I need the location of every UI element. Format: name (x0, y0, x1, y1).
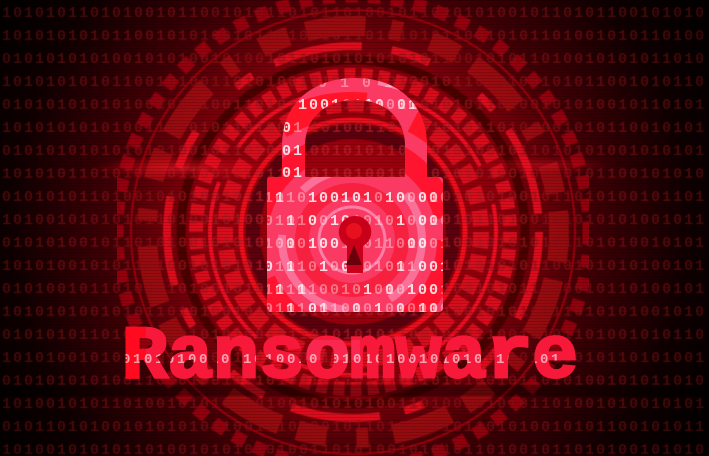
background binary digits: 1010100101011010010101010010101010110100101010101100101010100101 (2, 258, 706, 275)
background binary digits: 1010101101010010110010101101011010010110101010010110101100101010 (2, 166, 706, 183)
title: Ransomware: Ransomware (122, 316, 578, 400)
lock digits, dim layer: 01 01 (282, 165, 469, 182)
title: Ransomware (126, 326, 576, 379)
background binary digits: 0101010101010101001011010101001010110100101001011010101001010101 (2, 143, 706, 160)
lock shackle and body (267, 78, 443, 312)
lock digits, dim layer: 1010100101010100101 (264, 282, 473, 299)
title digit band: 0101010010110100101010101001010100101101 (122, 352, 562, 368)
dark band behind lower digits (0, 385, 709, 396)
background binary digits: 0101010101001101010010110100101101010010101001011010100101011010 (2, 373, 706, 390)
background binary digits: 0101010110100101010101001011010101011001010110010101101001010110 (2, 327, 706, 344)
background binary digits: 1010101101010010110010101101011010010110101010010110101100101010 (2, 5, 706, 22)
lock digits, dim layer: 0101001010101001010 (264, 213, 473, 230)
lock digits, dim layer: 1010100100110100101 (264, 236, 473, 253)
background binary digits: 0101010110100101010010110101010010101101010101001011010100101101 (2, 189, 706, 206)
background binary digits: 1010010101101001010101101001010101001101001010101101001010010101 (2, 396, 706, 413)
lock digits, bright layer: 1 01 0 1 0 10 1 0 (264, 301, 484, 318)
background binary digits: 0101001011010101010010101101001010100110100101011010010110100101 (2, 281, 706, 298)
background binary digits: 0101101010010101010110010101001011010100101101010010101100101011 (2, 419, 706, 436)
lock digits, bright layer: 0 1 1 01 1 0010 1 (264, 259, 484, 276)
lock digits, bright layer: 1 1 1 0 100 1 (264, 282, 473, 299)
title digit band (126, 326, 557, 379)
lock digits, bright layer: 0 100 0 00 1 (264, 236, 484, 253)
background binary digits: 0101010101010010101001101010010101100101010110100101010010110101 (2, 97, 706, 114)
background binary digits: 1010101010100110101011010010101001101001010110101001010110010101 (2, 120, 706, 137)
lock digits, dim layer (267, 78, 443, 312)
lock digits, bright layer: 01 01 (282, 165, 469, 182)
background binary digits: 1010010101010110100101001010101100101001010110100101010101001011 (2, 212, 706, 229)
lock digits, dim layer: 1001010101000 (298, 97, 441, 114)
lock digits, bright layer: 0 1 (282, 120, 458, 137)
padlock (267, 78, 443, 312)
background binary digits: 1010101001010110101001010101101010010110100101010011010101001010 (2, 304, 706, 321)
lock digits, dim layer: 0101001010101001010 (264, 301, 473, 318)
lock digits, dim layer: 01 01 (282, 143, 469, 160)
lock digits, dim layer: 01 01 (282, 120, 469, 137)
lock digits, bright layer: 1001 10 01000 (298, 97, 452, 114)
background binary digits: 1010101010110010100110101001010101101001011010100101011001010110 (2, 74, 706, 91)
background binary digits: 0101010010110101001010101001011010100110100101010101101010010101 (2, 235, 706, 252)
concentric tech rings (117, 0, 589, 456)
lock digits, dim layer: 1 0 1 0 1 0 1 (296, 75, 439, 92)
lock digits, bright layer (267, 99, 443, 312)
lock digits, dim layer: 0101010010100100101 (264, 259, 473, 276)
lock digits, dim layer: 1010100101010001011 (264, 190, 473, 207)
keyhole (339, 216, 371, 273)
left and right lens flares (90, 156, 615, 180)
lock digits, bright layer: 1 0 10 1 00 0 (264, 213, 473, 230)
lock digits, bright layer: 01 01 (282, 143, 469, 160)
background binary digits: 1010101010110010101001011010010110101010110010101101001010110100 (2, 28, 706, 45)
background binary digits: 1010100101010101101001010100110101001010110100101010010110101001 (2, 350, 706, 367)
lock digits, bright layer: 1 100101 10 00 1 (264, 190, 473, 207)
background binary digits: 0101010101001010100101001011010101010101100101011010010101011010 (2, 51, 706, 68)
